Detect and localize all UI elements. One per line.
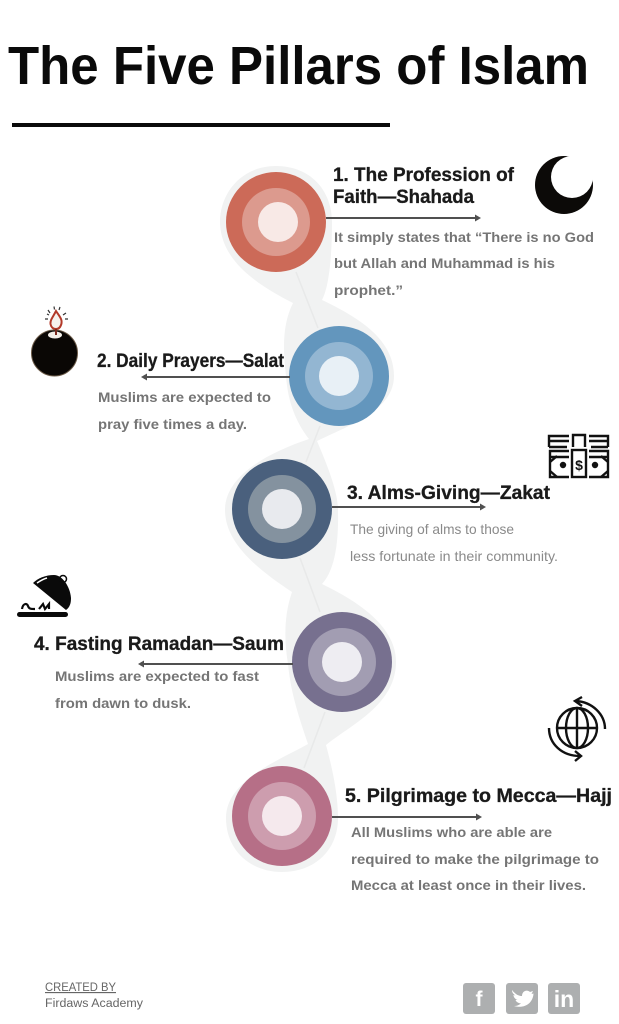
footer credit: CREATED BY	[45, 982, 116, 994]
footer credit	[45, 982, 143, 1010]
pillar 1: heading	[333, 165, 515, 208]
social icons	[463, 983, 580, 1014]
pillar 3: arrow	[332, 504, 486, 510]
pillar 5: circle	[232, 766, 332, 866]
pillar 1: description: It simply states that “There is no God	[334, 229, 594, 245]
icon: twitter	[506, 983, 538, 1014]
pillar 4: arrow	[138, 660, 293, 668]
pillar 1: arrow	[326, 214, 481, 222]
pillar 5: description	[351, 824, 599, 893]
pillar 5: heading: 5. Pilgrimage to Mecca—Hajj	[345, 786, 612, 807]
pillar 4: description	[55, 668, 259, 711]
icon: globe with rotating arrows	[549, 697, 605, 761]
pillar 3: description	[350, 521, 558, 564]
pillar 1: heading: Faith—Shahada	[333, 187, 474, 208]
title underline	[12, 123, 390, 127]
pillar 5: description: All Muslims who are able are	[351, 824, 552, 840]
pillar 2: circle	[289, 326, 389, 426]
pillar 3: circle	[232, 459, 332, 559]
pillar 2: description: Muslims are expected to	[98, 389, 271, 405]
icon: crescent moon	[535, 156, 593, 214]
pillar 3: heading: 3. Alms-Giving—Zakat	[347, 483, 551, 504]
icon: stack of money	[549, 435, 608, 477]
icon: facebook: f	[476, 988, 484, 1011]
icon: stack of money: $	[575, 457, 583, 473]
pillar 1: description	[334, 229, 594, 298]
pillar 3: description: The giving of alms to those	[350, 521, 514, 537]
pillar 2: arrow	[141, 374, 290, 380]
pillar 1: description: prophet.”	[334, 282, 403, 298]
pillar 2: description: pray five times a day.	[98, 416, 247, 432]
icon: linkedin: in	[554, 986, 574, 1012]
pillar 5: arrow	[332, 814, 482, 820]
pillar 1: heading: 1. The Profession of	[333, 165, 515, 186]
pillar 5: description: Mecca at least once in their lives.	[351, 877, 586, 893]
pillar 5: description: required to make the pilgrimage to	[351, 851, 599, 867]
footer credit: Firdaws Academy	[45, 998, 143, 1010]
icon: bomb with lit fuse	[32, 306, 78, 376]
pillar 2: description	[98, 389, 271, 432]
pillar 3: description: less fortunate in their community.	[350, 548, 558, 564]
pillar 4: description: from dawn to dusk.	[55, 695, 191, 711]
pillar 1: description: but Allah and Muhammad is his	[334, 255, 555, 271]
pillar 4: heading: 4. Fasting Ramadan—Saum	[34, 634, 284, 655]
icon: food platter with cloche	[17, 575, 71, 617]
timeline ribbon	[220, 166, 396, 872]
pillar 2: heading: 2. Daily Prayers—Salat	[97, 351, 285, 372]
pillar 4: description: Muslims are expected to fast	[55, 668, 259, 684]
pillar 1: circle	[226, 172, 326, 272]
pillar 4: circle	[292, 612, 392, 712]
title: The Five Pillars of Islam	[8, 36, 589, 96]
